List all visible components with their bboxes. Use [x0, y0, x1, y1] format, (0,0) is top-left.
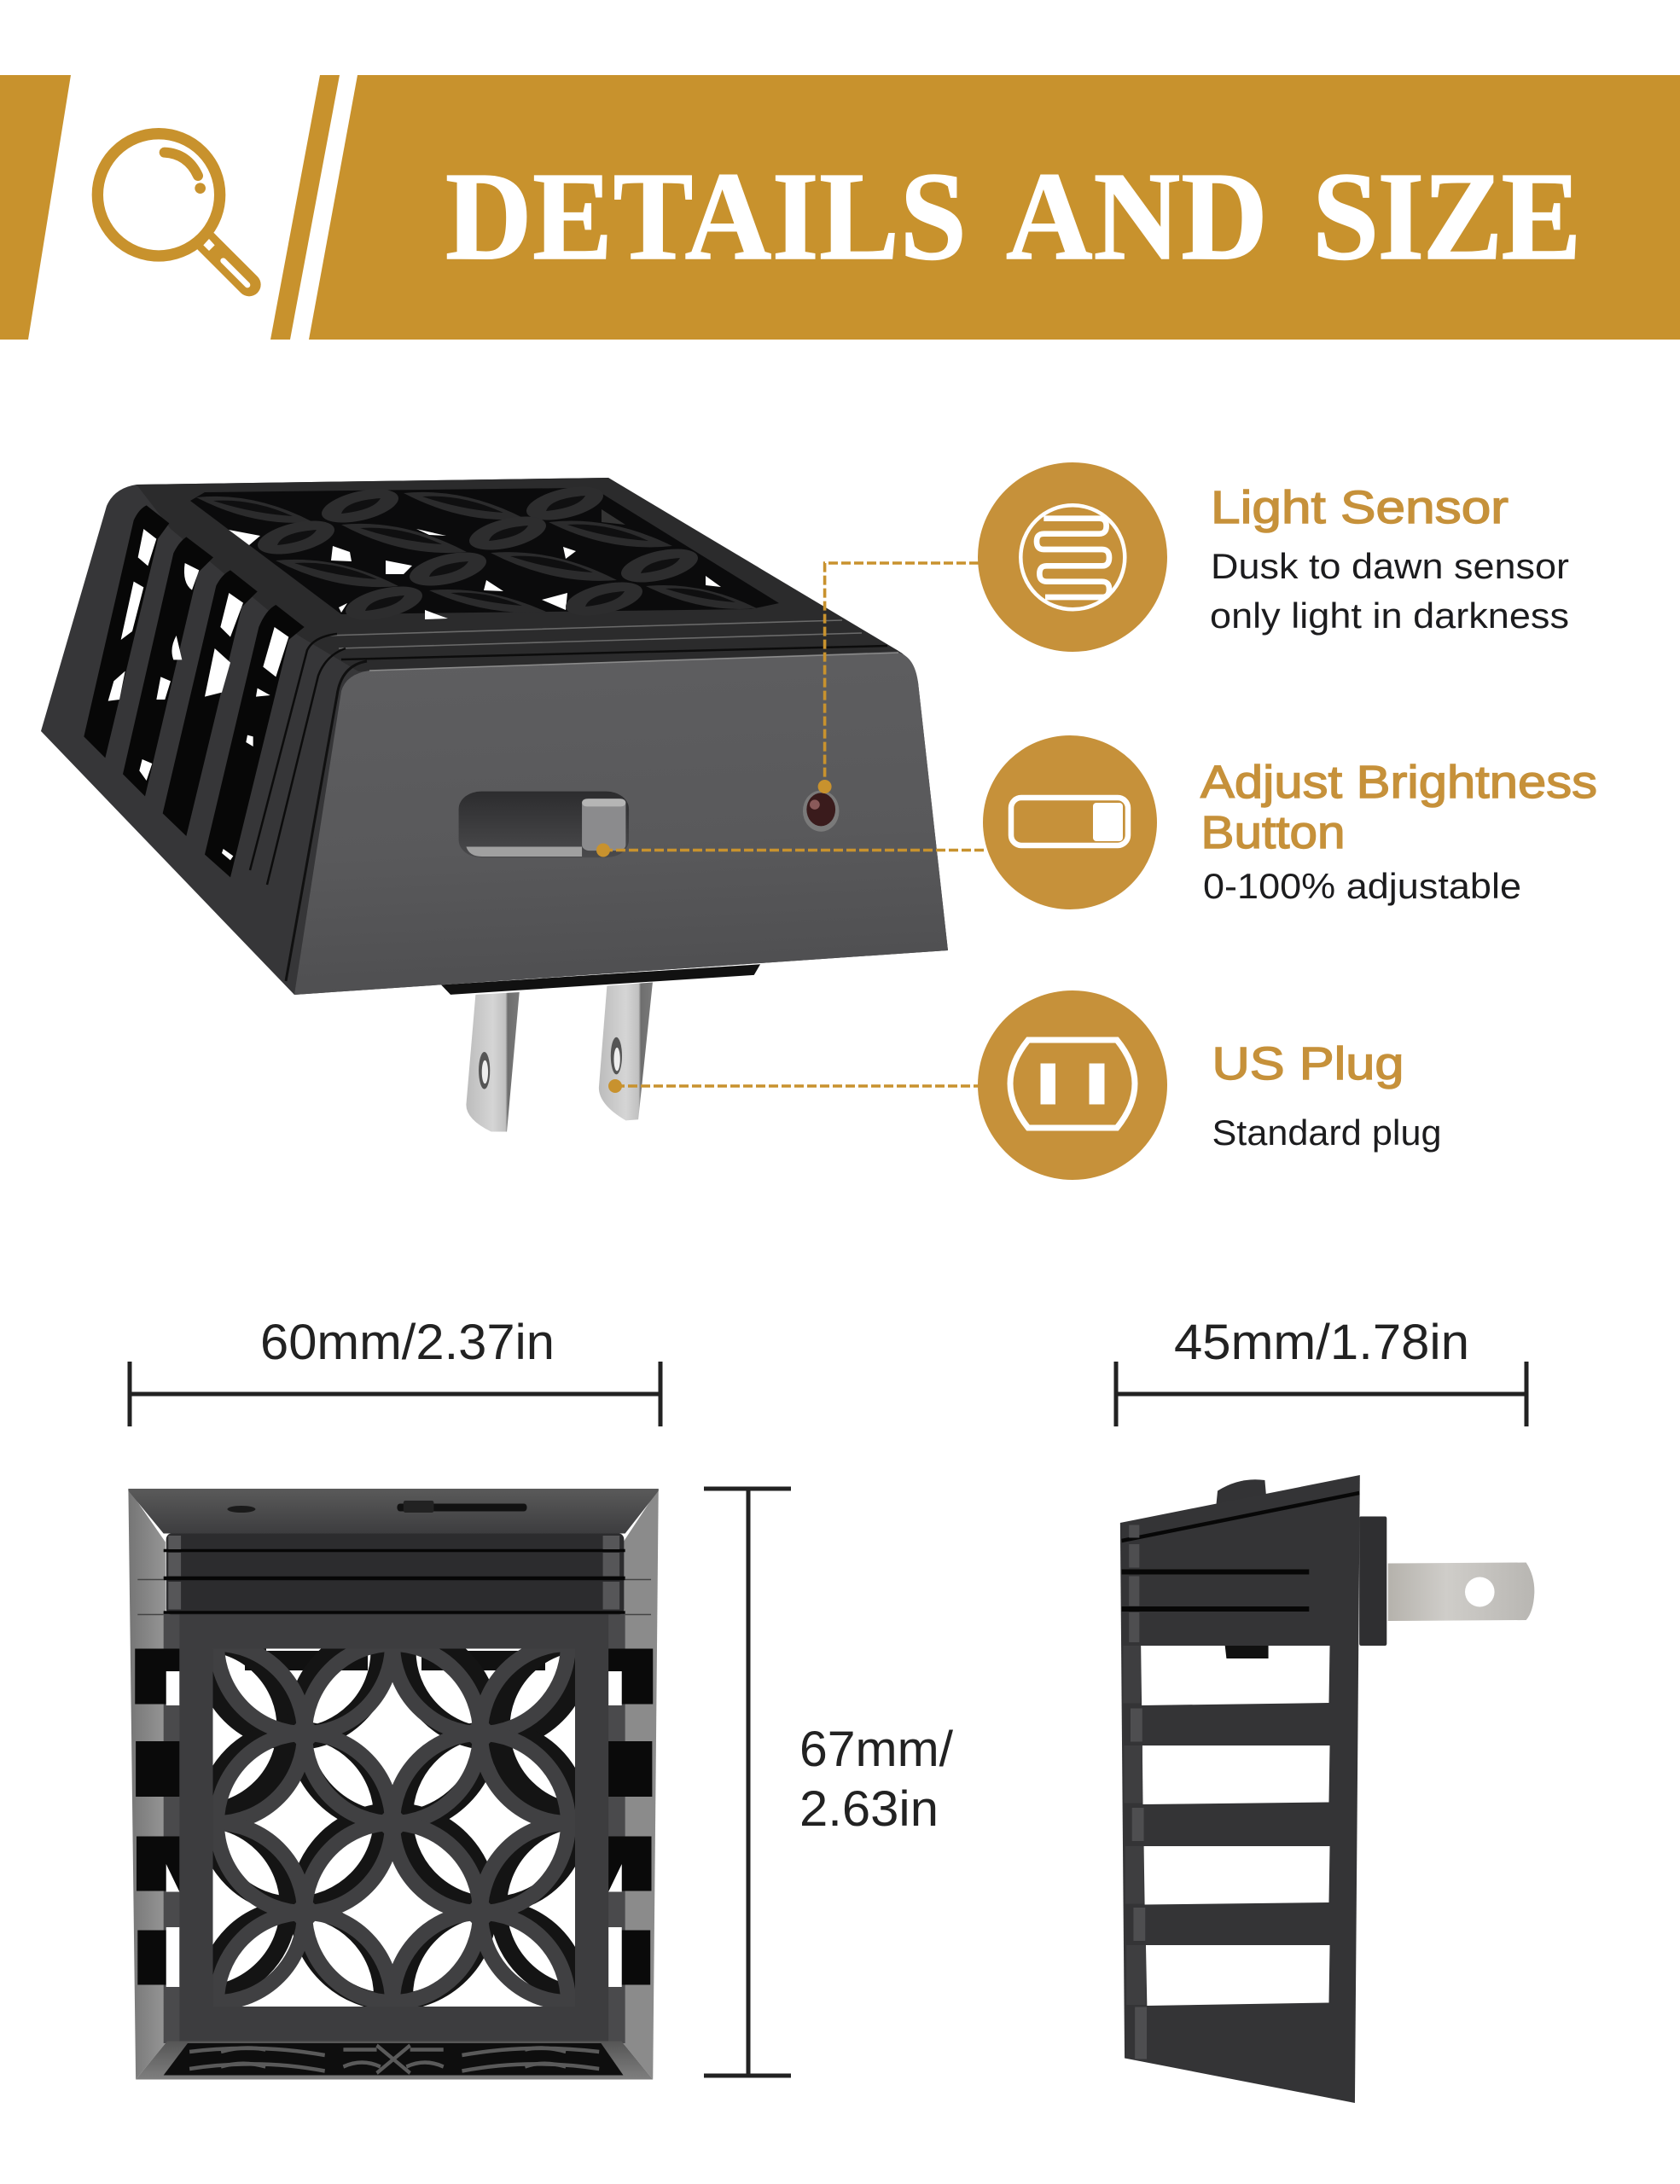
- leader line: [603, 849, 986, 851]
- top grille: [190, 480, 779, 626]
- sensor and slider on top plate: [227, 1501, 527, 1513]
- front face: [294, 653, 948, 995]
- side plates: [128, 1489, 167, 2080]
- product photo: side view: [1120, 1475, 1534, 2103]
- icon: photoresistor: [978, 462, 1167, 652]
- plug base: [1359, 1517, 1386, 1646]
- icon: slider toggle: [983, 735, 1157, 909]
- height dimension: 67mm: 2.63in: [799, 1781, 939, 1837]
- bands around front edge: [250, 620, 887, 981]
- heading line 2: Button: [1201, 807, 1345, 858]
- vent side strips: [1123, 1646, 1146, 2005]
- central housing: [179, 1612, 608, 2041]
- lattice knots: [254, 480, 701, 626]
- top plate: [137, 478, 898, 671]
- banner main block: [309, 75, 1680, 340]
- heading: US Plug: [1212, 1038, 1404, 1089]
- front lattice circles: [213, 1648, 575, 2007]
- leader dot: [818, 780, 832, 793]
- horizontal band grooves: [137, 1551, 651, 1614]
- title: AND: [1006, 147, 1268, 287]
- banner left block: [0, 75, 71, 340]
- callout: light sensor: [818, 462, 1569, 793]
- vent openings: [1141, 1646, 1330, 2006]
- height dimension: 67mm: 67mm/: [799, 1722, 954, 1777]
- width dimension: 60mm: [130, 1315, 660, 1426]
- depth dimension: 45mm: 45mm/1.78in: [1174, 1315, 1469, 1370]
- leader dot: [596, 843, 610, 857]
- icon: outlet: [978, 990, 1167, 1180]
- heading: Adjust Brightness: [1200, 757, 1597, 808]
- description: Standard plug: [1212, 1112, 1442, 1153]
- plug prong: [1388, 1563, 1534, 1621]
- leader line: [615, 1084, 979, 1088]
- side vent slots: [84, 505, 305, 877]
- lattice window: [213, 1648, 575, 2007]
- lattice leaf hollows: [213, 497, 735, 606]
- header banner: [0, 75, 1680, 340]
- heading: Light Sensor: [1211, 482, 1509, 533]
- title: DETAILS: [445, 147, 967, 287]
- lattice knots: [294, 1723, 491, 1923]
- edge highlights: [168, 1536, 619, 1609]
- lattice knot hollows: [277, 496, 680, 611]
- plug base: [441, 964, 760, 995]
- banner diagonal stripe: [270, 75, 340, 340]
- product photo: angled view: [41, 478, 948, 1132]
- back lattice: [213, 1648, 575, 2007]
- prong right: [599, 982, 653, 1120]
- side strips next to housing: [164, 1612, 182, 2043]
- tab over vent: [1225, 1646, 1269, 1658]
- depth dimension: 45mm: [1116, 1315, 1526, 1426]
- body grooves: [1122, 1493, 1359, 1609]
- title: [445, 147, 1581, 287]
- title: SIZE: [1312, 147, 1581, 287]
- body: [1120, 1475, 1360, 2103]
- icon: magnifying glass: [97, 134, 249, 285]
- light sensor eye: [803, 790, 839, 832]
- top bump: [1216, 1479, 1266, 1506]
- bottom plate with lattice: [136, 2041, 653, 2080]
- body silhouette: [41, 478, 948, 995]
- description line 2: only light in darkness: [1210, 595, 1569, 636]
- prong left: [466, 992, 520, 1132]
- leader line: [825, 563, 979, 787]
- brightness slider slot: [459, 792, 629, 857]
- callout: US plug: [608, 990, 1442, 1180]
- width dimension: 60mm: 60mm/2.37in: [260, 1315, 555, 1370]
- description: 0-100% adjustable: [1203, 866, 1521, 906]
- callout: brightness button: [596, 735, 1597, 909]
- grille window: [190, 488, 779, 614]
- product photo: front view: [113, 1489, 674, 2092]
- height dimension: 67mm: [704, 1489, 954, 2076]
- side notches: [135, 1648, 653, 1987]
- lattice leaves: [196, 492, 757, 613]
- description: Dusk to dawn sensor: [1211, 546, 1569, 586]
- edge highlights: [1129, 1525, 1147, 2059]
- leader dot: [608, 1079, 622, 1093]
- top plate: [128, 1489, 659, 1534]
